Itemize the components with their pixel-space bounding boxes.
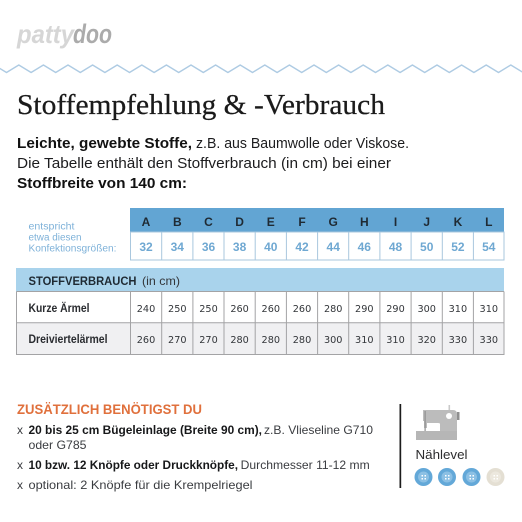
- row: Kurze Ärmel: [28, 302, 498, 315]
- row: Kurze Ärmel: 260: [262, 304, 280, 315]
- row: Dreiviertelärmel: 330: [480, 335, 498, 346]
- row: Dreiviertelärmel: 310: [355, 335, 374, 346]
- size note: etwa diesen: [28, 232, 82, 244]
- button 4 empty: [486, 468, 504, 486]
- heading: additional materials: ZUSÄTZLICH BENÖTIGST DU: [17, 402, 202, 417]
- row: Kurze Ärmel: 250: [199, 304, 218, 315]
- size numbers: 52: [451, 240, 465, 254]
- row: Kurze Ärmel: 250: [168, 304, 187, 315]
- row: Dreiviertelärmel: 270: [168, 335, 187, 346]
- materials list: z.B. Vlieseline G710: [264, 423, 373, 437]
- size numbers: [139, 240, 496, 254]
- materials list: x: [17, 458, 23, 472]
- size numbers: 48: [389, 240, 402, 254]
- size letters: [142, 215, 492, 229]
- size letters: C: [204, 215, 213, 229]
- intro text: z.B. aus Baumwolle oder Viskose.: [196, 135, 409, 152]
- zigzag wave divider: [0, 65, 522, 72]
- size numbers: 50: [420, 240, 434, 254]
- button 1 filled: [414, 468, 432, 486]
- intro text: [17, 135, 409, 192]
- intro text: Stoffbreite von 140 cm:: [17, 175, 187, 192]
- vertical divider: [400, 404, 401, 488]
- size numbers: 42: [295, 240, 309, 254]
- size table: [130, 208, 504, 260]
- size letters: H: [360, 215, 369, 229]
- size letters: A: [142, 215, 151, 229]
- materials list: x: [17, 478, 23, 492]
- row: Dreiviertelärmel: 280: [293, 335, 311, 346]
- row: Kurze Ärmel: 310: [449, 304, 467, 315]
- row: Kurze Ärmel: 280: [324, 304, 342, 315]
- row: Dreiviertelärmel: 310: [386, 335, 405, 346]
- materials list: Durchmesser 11-12 mm: [241, 458, 370, 472]
- intro text: Die Tabelle enthält den Stoffverbrauch (in cm) bei einer: [17, 155, 391, 172]
- logo: pattydoo: patty: [16, 19, 75, 49]
- size note: entspricht: [28, 222, 75, 232]
- size letters: G: [329, 215, 338, 229]
- label: Nählevel: Nählevel: [416, 447, 468, 462]
- row: Dreiviertelärmel: 280: [230, 335, 249, 346]
- size note: [28, 222, 116, 254]
- materials list: optional: 2 Knöpfe für die Krempelriegel: [28, 478, 252, 492]
- size letters: E: [267, 215, 275, 229]
- size numbers: 46: [358, 240, 371, 254]
- size numbers: 54: [482, 240, 496, 254]
- size letters: L: [485, 215, 492, 229]
- table header band: [16, 268, 504, 292]
- size letters: D: [235, 215, 244, 229]
- row: Dreiviertelärmel: [28, 334, 498, 346]
- table header band: STOFFVERBRAUCH: [28, 274, 136, 288]
- intro text: Leichte, gewebte Stoffe,: [17, 135, 192, 152]
- materials list: x: [17, 423, 23, 437]
- title: Stoffempfehlung & -Verbrauch: [17, 90, 385, 121]
- skill level buttons: [414, 468, 504, 486]
- size letters: I: [394, 215, 397, 229]
- size note: Konfektionsgrößen:: [28, 244, 116, 254]
- row: Dreiviertelärmel: 320: [417, 335, 436, 346]
- materials list: 20 bis 25 cm Bügeleinlage (Breite 90 cm),: [28, 423, 262, 437]
- row: Dreiviertelärmel: 270: [199, 335, 218, 346]
- size letters: K: [454, 215, 463, 229]
- row: Kurze Ärmel: 260: [230, 304, 249, 315]
- materials list: 10 bzw. 12 Knöpfe oder Druckknöpfe,: [28, 458, 238, 472]
- row: Kurze Ärmel: 260: [293, 304, 311, 315]
- row: Kurze Ärmel: 310: [480, 304, 498, 315]
- table header band: (in cm): [142, 274, 180, 288]
- row: Kurze Ärmel: Kurze Ärmel: [28, 302, 90, 315]
- materials list: [17, 423, 373, 492]
- row: Dreiviertelärmel: Dreiviertelärmel: [28, 334, 108, 346]
- row: Dreiviertelärmel: 260: [137, 335, 155, 346]
- row: Kurze Ärmel: 300: [417, 304, 436, 315]
- fabric consumption table: [16, 268, 504, 354]
- row: Dreiviertelärmel: 280: [262, 335, 280, 346]
- size letters: F: [298, 215, 306, 229]
- button 2 filled: [438, 468, 456, 486]
- size numbers: 40: [264, 240, 278, 254]
- row: Kurze Ärmel: 240: [137, 304, 155, 315]
- row: Kurze Ärmel: 290: [386, 304, 405, 315]
- size numbers: 36: [202, 240, 215, 254]
- row: Dreiviertelärmel: 330: [449, 335, 467, 346]
- size numbers: 44: [327, 240, 340, 254]
- button 3 filled: [462, 468, 480, 486]
- size numbers: 38: [233, 240, 247, 254]
- size numbers: 34: [171, 240, 184, 254]
- logo: pattydoo: doo: [73, 19, 112, 49]
- row: Kurze Ärmel: 290: [355, 304, 374, 315]
- materials list: oder G785: [28, 438, 87, 452]
- logo: pattydoo: [16, 19, 112, 49]
- size letters: J: [423, 215, 430, 229]
- size letters: B: [173, 215, 182, 229]
- icon: sewing machine: [416, 405, 460, 440]
- row: Dreiviertelärmel: 300: [324, 335, 342, 346]
- size numbers: 32: [139, 240, 153, 254]
